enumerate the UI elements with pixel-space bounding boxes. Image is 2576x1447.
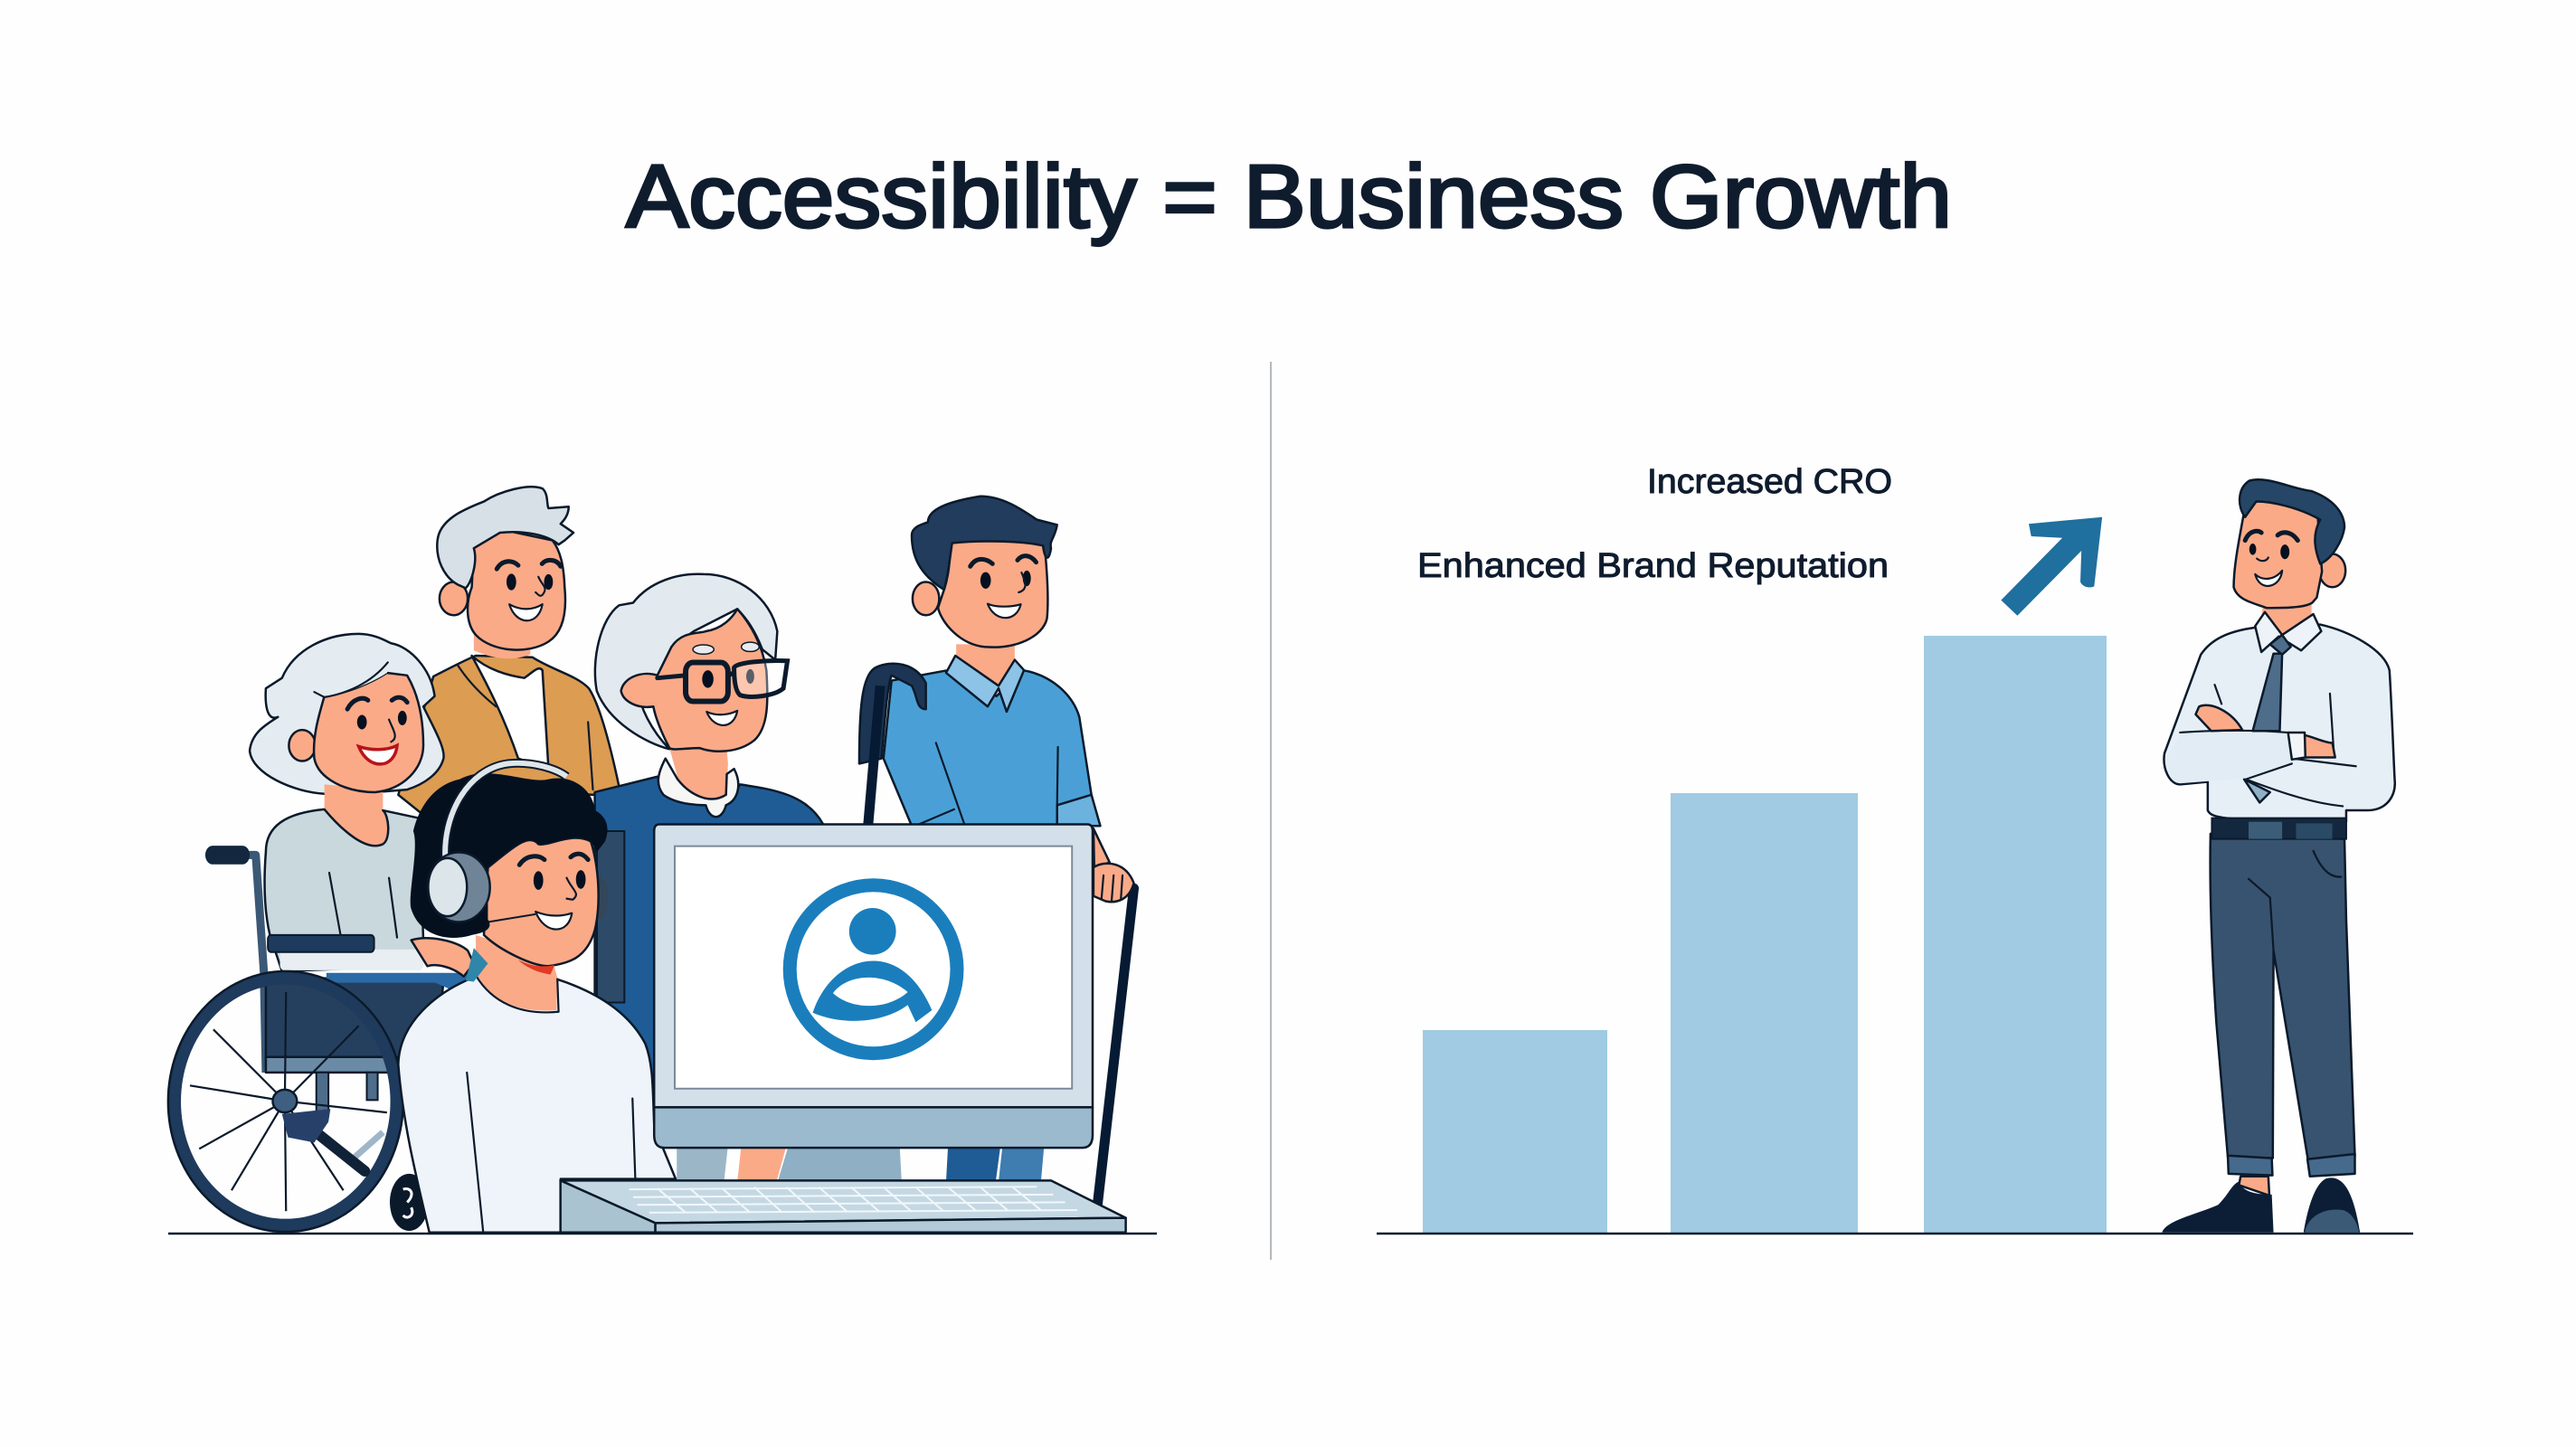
elder man in orange jacket <box>398 487 620 818</box>
armrest <box>268 935 374 952</box>
tie <box>2253 654 2282 731</box>
shoes <box>2162 1181 2274 1233</box>
sweater <box>265 809 423 971</box>
computer monitor with accessibility logo <box>654 825 1093 1148</box>
headset <box>428 763 566 922</box>
panel: business growth chart <box>1377 463 2413 1234</box>
legs below monitor <box>677 1145 728 1181</box>
keyboard <box>561 1180 1126 1233</box>
wheel <box>168 971 429 1232</box>
man with cane in blue sweater <box>677 497 1134 1205</box>
ground line right <box>1377 1233 2413 1234</box>
crossed arms <box>2195 705 2242 731</box>
wheelchair frame <box>205 831 624 1161</box>
label: Increased CRO: Increased CRO <box>1647 463 1892 501</box>
pants <box>2211 834 2354 1161</box>
cane handle <box>859 664 926 763</box>
forearm and hand on cane <box>1094 828 1110 868</box>
bar chart <box>1423 636 2107 1234</box>
panel divider <box>1270 362 1272 1260</box>
growth arrow <box>2001 517 2102 616</box>
collar <box>2255 612 2321 652</box>
person with headset <box>398 763 676 1233</box>
hair <box>250 634 444 794</box>
ground line left <box>168 1233 1157 1234</box>
neck <box>2261 601 2312 639</box>
belt <box>2211 818 2346 839</box>
panel: diverse users illustration <box>168 487 1157 1234</box>
title: Accessibility = Business Growth <box>626 147 1952 246</box>
woman with glasses in blue sweater <box>595 574 823 1085</box>
hand on shoulder <box>412 938 474 977</box>
head <box>2319 554 2345 587</box>
label: Enhanced Brand Reputation: Enhanced Brand Reputation <box>1417 547 1889 585</box>
businessman standing with crossed arms <box>2162 479 2395 1233</box>
shirt <box>2164 625 2395 822</box>
woman in wheelchair <box>168 634 624 1232</box>
icon: accessibility person <box>790 885 957 1054</box>
